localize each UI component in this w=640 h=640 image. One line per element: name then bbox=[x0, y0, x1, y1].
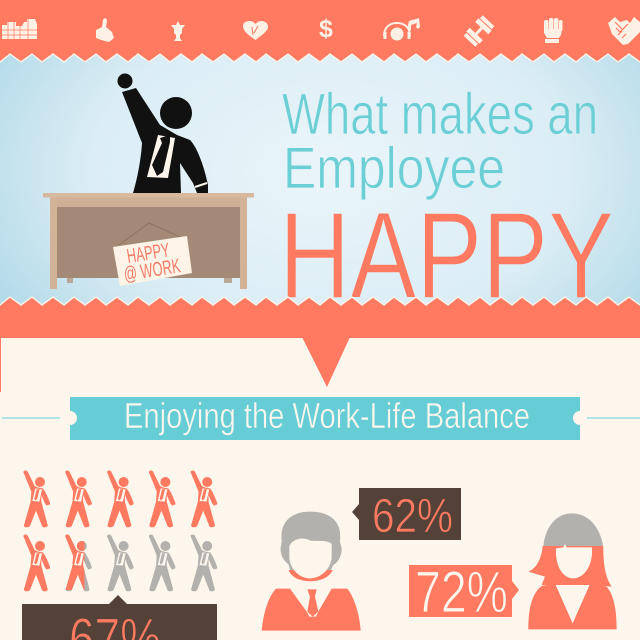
icon: happy employee raising fist bbox=[118, 74, 208, 193]
icon: handshake bbox=[608, 17, 640, 45]
icon: thumbs up bbox=[96, 18, 114, 42]
icon: headphones with note bbox=[384, 18, 420, 40]
callout: 62%: 62% bbox=[372, 490, 453, 543]
edge sliver bbox=[0, 338, 1, 392]
header band bbox=[0, 0, 640, 62]
icon: raised fist bbox=[544, 18, 562, 43]
icon: city buildings bbox=[2, 19, 37, 39]
icon: trophy star bbox=[171, 21, 185, 41]
callout: 67% bbox=[22, 595, 217, 640]
icon: dumbbell bbox=[463, 15, 495, 47]
callout: 72%: 72% bbox=[415, 560, 508, 625]
icon: female employee bbox=[528, 513, 617, 629]
icon: broken heart bbox=[243, 21, 268, 40]
icon: dollar sign: $ bbox=[319, 15, 333, 43]
hanging sign: happy at work: @ WORK bbox=[122, 255, 183, 286]
title: What makes an Employee HAPPY bbox=[279, 82, 614, 325]
hero background panel bbox=[0, 48, 640, 310]
hanging sign: happy at work bbox=[113, 223, 192, 286]
top icon row bbox=[2, 15, 640, 47]
section heading banner: Enjoying the Work-Life Balance bbox=[124, 395, 530, 436]
bottom band with zigzag bbox=[0, 297, 640, 348]
hanging sign: happy at work: HAPPY bbox=[125, 239, 171, 268]
title: What makes an Employee HAPPY: Employee bbox=[283, 136, 505, 201]
icon: male employee bbox=[262, 512, 361, 631]
pictogram: 67 percent of employees bbox=[23, 470, 217, 591]
desk bbox=[43, 193, 254, 289]
pointer triangle bbox=[302, 337, 350, 387]
